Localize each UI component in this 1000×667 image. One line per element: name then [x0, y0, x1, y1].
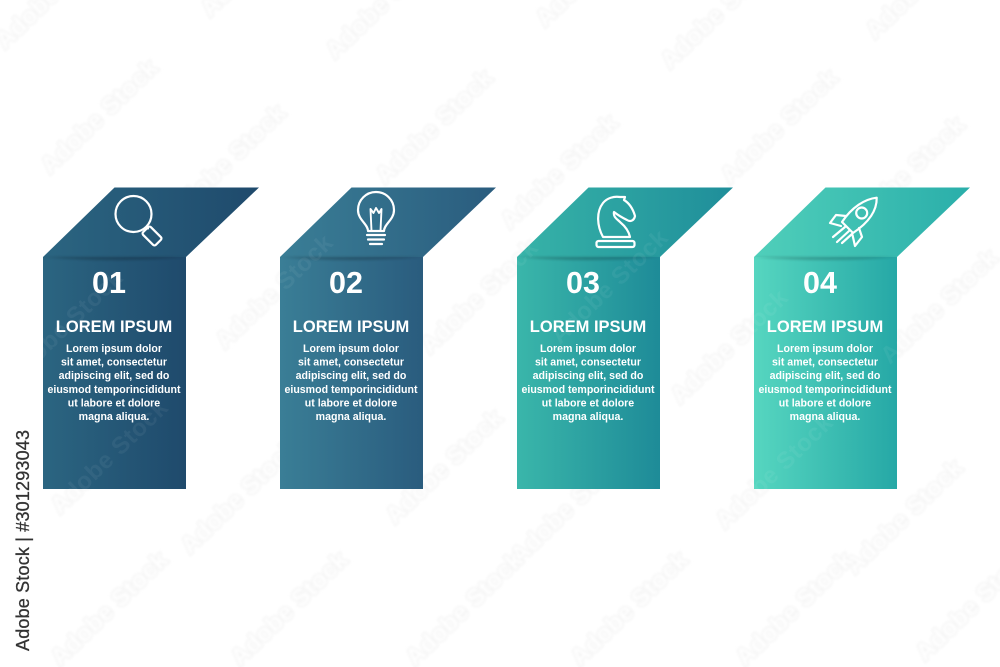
- watermark pattern: Adobe Stock: [415, 234, 544, 359]
- watermark over cards: Adobe Stock: [545, 224, 674, 349]
- icon: magnifying glass: [116, 196, 162, 246]
- text block 01: adipiscing elit, sed do: [59, 370, 170, 382]
- text block 02: magna aliqua.: [316, 411, 386, 423]
- card body 02: [280, 257, 423, 489]
- text block 01: Lorem ipsum dolor: [66, 343, 162, 355]
- text block 04: Lorem ipsum dolor: [777, 343, 873, 355]
- watermark pattern: Adobe Stock: [380, 404, 509, 529]
- watermark pattern: Adobe Stock: [505, 444, 634, 569]
- side credit text: Adobe Stock | #301293043: [13, 430, 33, 651]
- watermark pattern: Adobe Stock: [875, 244, 1000, 369]
- text block 03: magna aliqua.: [553, 411, 623, 423]
- watermark pattern: Adobe Stock: [710, 409, 839, 534]
- heading 04: LOREM IPSUM: [767, 318, 883, 336]
- text block 02: Lorem ipsum dolor: [303, 343, 399, 355]
- heading 02: LOREM IPSUM: [293, 318, 409, 336]
- text block 01: ut labore et dolore: [68, 397, 160, 409]
- watermark pattern: Adobe Stock: [370, 64, 499, 189]
- watermark over cards: Adobe Stock: [875, 244, 1000, 369]
- watermark over cards: Adobe Stock: [710, 409, 839, 534]
- watermark pattern: Adobe Stock: [45, 394, 174, 519]
- watermark pattern: Adobe Stock: [163, 99, 292, 224]
- text block 02: ut labore et dolore: [305, 397, 397, 409]
- text block 03: sit amet, consectetur: [535, 357, 641, 369]
- watermark over cards: Adobe Stock: [210, 229, 339, 354]
- text block 03: adipiscing elit, sed do: [533, 370, 644, 382]
- text block 04: adipiscing elit, sed do: [770, 370, 881, 382]
- text block 04: sit amet, consectetur: [772, 357, 878, 369]
- watermark pattern: Adobe Stock: [175, 434, 304, 559]
- card body 04: [754, 257, 897, 489]
- watermark pattern: Adobe Stock: [495, 109, 624, 234]
- panel: step 04: [754, 188, 970, 489]
- watermark pattern: Adobe Stock: [840, 454, 969, 579]
- text block 01: eiusmod temporincididunt: [47, 384, 181, 396]
- text block 01: magna aliqua.: [79, 411, 149, 423]
- watermark over cards: Adobe Stock: [0, 264, 129, 389]
- text block 04: magna aliqua.: [790, 411, 860, 423]
- text block 01: sit amet, consectetur: [61, 357, 167, 369]
- number 02: 02: [329, 266, 363, 300]
- icon: rocket: [830, 198, 877, 246]
- top flap 02: [280, 188, 496, 257]
- panel: step 03: [517, 188, 733, 489]
- icon: chess knight: [596, 197, 635, 247]
- panel: step 02: [280, 188, 496, 489]
- watermark over cards: [0, 224, 1000, 534]
- number 04: 04: [803, 266, 837, 300]
- icon: light bulb: [358, 192, 394, 244]
- text block 02: sit amet, consectetur: [298, 357, 404, 369]
- watermark pattern: Adobe Stock: [665, 284, 794, 409]
- watermark over cards: Adobe Stock: [415, 234, 544, 359]
- text block 04: ut labore et dolore: [779, 397, 871, 409]
- number 03: 03: [566, 266, 600, 300]
- watermark over cards: Adobe Stock: [45, 394, 174, 519]
- heading 03: LOREM IPSUM: [530, 318, 646, 336]
- top flap 01: [43, 188, 259, 257]
- watermark pattern: Adobe Stock: [35, 54, 164, 179]
- top flap 03: [517, 188, 733, 257]
- watermark pattern: Adobe Stock: [842, 111, 971, 236]
- card body 03: [517, 257, 660, 489]
- text block 03: eiusmod temporincididunt: [521, 384, 655, 396]
- text block 04: eiusmod temporincididunt: [758, 384, 892, 396]
- number 01: 01: [92, 266, 126, 300]
- watermark pattern: Adobe Stock: [210, 229, 339, 354]
- text block 02: eiusmod temporincididunt: [284, 384, 418, 396]
- card body 01: [43, 257, 186, 489]
- watermark pattern: Adobe Stock: [715, 64, 844, 189]
- watermark over cards: Adobe Stock: [665, 284, 794, 409]
- top flap 04: [754, 188, 970, 257]
- text block 02: adipiscing elit, sed do: [296, 370, 407, 382]
- text block 03: Lorem ipsum dolor: [540, 343, 636, 355]
- panel: step 01: [43, 188, 259, 489]
- text block 03: ut labore et dolore: [542, 397, 634, 409]
- heading 01: LOREM IPSUM: [56, 318, 172, 336]
